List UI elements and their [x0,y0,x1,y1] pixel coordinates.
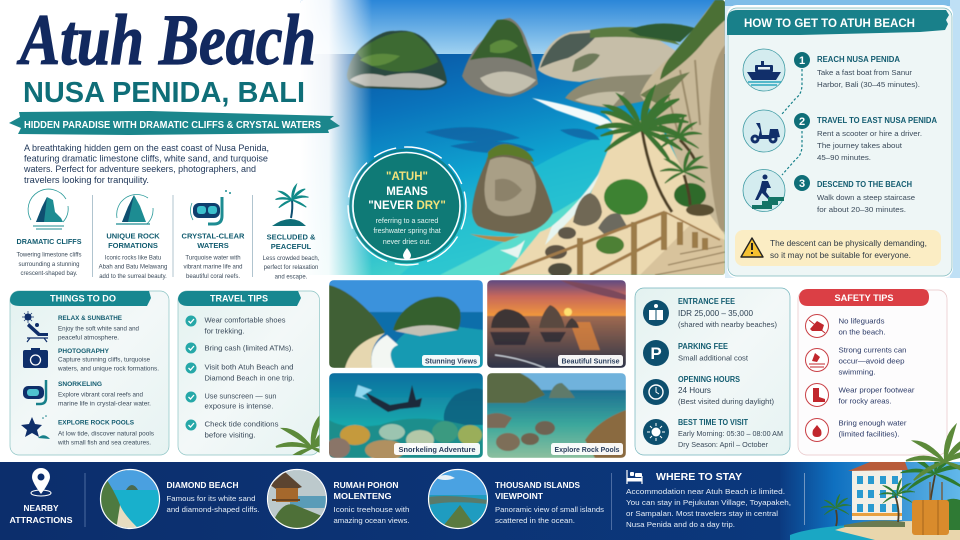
item: parking fee [643,340,748,366]
tips text: occur—avoid deep [838,356,904,366]
icon: bed [627,470,642,484]
sea colour patches [400,134,614,275]
tips text: Bring enough water [838,418,907,428]
item: snorkeling [23,380,151,408]
attraction: Thousand Islands: THOUSAND ISLANDS [495,481,580,490]
sky strip behind route panel [725,0,960,285]
item: entrance fee: ENTRANCE FEE [678,297,735,306]
icon: clock [643,379,669,405]
stair path [640,225,725,275]
icon: scooter [743,110,785,152]
where to stay: Nusa Penida and do a day trip. [626,520,735,529]
attraction: Thousand Islands: VIEWPOINT [495,492,543,501]
header: THINGS TO DO [50,294,116,304]
item: best time: Dry Season: April – October [678,442,769,449]
item: relax: Enjoy the soft white sand and [58,326,139,332]
item: best time: Early Morning: 05:30 – 08:00 AM [678,431,783,438]
feature: dramatic cliffs: crescent-shaped bay. [21,271,78,277]
item: snorkeling: Explore vibrant coral reefs and [58,392,143,398]
icon: ticket info [643,300,669,326]
palm leaf decoration [276,416,320,455]
left island [347,31,447,90]
icon: sun [643,419,669,445]
item: snorkeling: SNORKELING [58,381,102,388]
step 2: TRAVEL TO EAST NUSA PENIDA [817,116,937,125]
quote badge: Atuh means never dry [348,147,466,265]
where to stay: WHERE TO STAY [656,472,742,483]
step 1: REACH NUSA PENIDA [817,55,900,64]
tagline ribbon: HIDDEN PARADISE WITH DRAMATIC CLIFFS & CRYSTAL WATERS [24,120,321,131]
big right cliff [640,0,725,235]
tips text: for trekking. [204,326,244,336]
route dashed connectors [782,69,802,175]
feature: secluded and peaceful: Less crowded beach, [263,256,320,262]
feature: secluded and peaceful: SECLUDED & [267,232,316,242]
item: opening hours: (Best visited during daylight) [678,399,774,406]
attraction: Diamond Beach [100,468,260,530]
icon: palm island [272,185,308,226]
where to stay: or Sampalan. Most travelers stay in central [626,509,778,518]
caption: Snorkeling Adventure [398,445,476,454]
tips text: Wear proper footwear [838,386,915,394]
tips text [838,316,915,438]
item: entrance fee: IDR 25,000 – 35,000 [678,309,754,318]
tips text [204,316,294,440]
check marks [186,316,196,430]
attraction: Rumah Pohon: MOLENTENG [334,492,392,501]
header [10,291,151,306]
step 1: Take a fast boat from Sanur [817,68,913,77]
feature: unique rock formations: FORMATIONS [108,241,158,250]
feature: crystal-clear waters: Turquoise water with [185,256,241,262]
item: entrance fee: (shared with nearby beaches) [678,322,777,329]
item: parking fee: Small additional cost [678,356,748,362]
feature: dramatic cliffs: DRAMATIC CLIFFS [16,237,82,246]
quote badge: Atuh means never dry: never dries out. [383,239,431,246]
step 2 [743,110,937,162]
icon: starfish [21,415,50,439]
palm leaf decoration at right [906,426,960,480]
feature: unique rock formations: UNIQUE ROCK [106,232,160,240]
feature: secluded and peaceful: and escape. [275,274,308,280]
attraction: Diamond Beach: Famous for its white sand [166,494,256,503]
where to stay: Accommodation near Atuh Beach is limited. [626,487,785,496]
icon: snorkel mask [191,190,231,224]
icon: sun lounger [22,311,48,342]
subtitle: NUSA PENIDA, BALI [23,77,305,109]
step 2: 2 [799,116,805,128]
intro paragraph: waters. Perfect for adventure seekers, photographers, and [23,164,256,174]
tips text: Use sunscreen — sun [204,392,276,400]
hero photo: beach scene [300,0,725,275]
tips text: before visiting. [204,430,256,440]
heading: NEARBY [23,503,59,513]
quote badge: Atuh means never dry: "NEVER DRY" [368,200,446,212]
attraction: Thousand Islands: Panoramic view of small islands [495,505,604,514]
where to stay [626,470,791,529]
photo: stunning views [329,280,483,368]
item: rock pools: with small fish and sea creatures. [57,440,151,446]
palm trees [642,130,695,212]
icon: cliffs [28,189,68,229]
icon: rock [116,194,153,224]
panel: things to do [10,291,169,455]
feature: dramatic cliffs [16,189,82,277]
beach sand [505,112,725,275]
attraction: Thousand Islands: scattered in the ocean. [495,516,575,525]
step 3: DESCEND TO THE BEACH [817,180,912,189]
intro paragraph: travelers looking for tranquility. [24,175,149,185]
intro paragraph [23,143,269,185]
feature: crystal-clear waters: beautiful coral reefs. [186,274,240,280]
step 2: 45–90 minutes. [817,153,871,162]
shore rocks [573,193,602,226]
photo: explore rock pools [487,373,626,458]
green bushes [604,179,648,215]
item: relax: RELAX & SUNBATHE [58,315,122,322]
header ribbon [727,10,949,35]
step 3: for about 20–30 minutes. [817,205,906,214]
icon: boat [743,49,785,91]
panel: travel tips [178,290,320,456]
divider [92,195,252,277]
tips text: swimming. [838,368,876,376]
panel: practical info [635,288,790,455]
item: rock pools [21,415,154,446]
foreground rock [472,144,553,234]
icon: snorkel [23,380,46,404]
item: opening hours: 24 Hours [678,386,711,395]
item: parking fee: PARKING FEE [678,342,728,351]
heading [10,503,73,525]
item: rock pools: EXPLORE ROCK POOLS [58,420,134,426]
icon: map pin [31,468,51,496]
attraction: Rumah Pohon: RUMAH POHON [334,481,399,490]
panel: how to get to Atuh Beach [727,5,953,278]
warning callout [735,230,941,266]
tips text: No lifeguards [838,316,885,326]
title: Atuh Beach [17,0,316,80]
intro paragraph: featuring dramatic limestone cliffs, white sand, and turquoise [24,154,268,164]
intro paragraph: A breathtaking hidden gem on the east coast of Nusa Penida, [24,143,269,153]
step 3 [743,170,915,214]
feature: crystal-clear waters: CRYSTAL-CLEAR [182,232,245,240]
feature: unique rock formations [99,194,167,280]
icon: parking: P [650,344,662,363]
feature: unique rock formations: add to the surreal beauty. [99,274,167,280]
hotel scene [784,462,960,540]
where to stay: You can stay in Pejukutan Village, Toyapakeh, [626,498,791,507]
tagline ribbon [9,111,340,135]
tips text: on the beach. [838,328,886,336]
item: best time [643,418,783,449]
step 1 [743,49,920,91]
quote badge: Atuh means never dry: freshwater spring that [373,228,441,235]
header [799,289,929,306]
feature: dramatic cliffs: surrounding a stunning [18,262,80,268]
quote badge: Atuh means never dry: "ATUH" [386,171,428,183]
attraction: Rumah Pohon: Iconic treehouse with [334,505,410,514]
item: rock pools: At low tide, discover natural pools [58,430,154,438]
warning callout: so it may not be suitable for everyone. [770,251,911,260]
item: relax: peaceful atmosphere. [58,334,119,342]
feature: secluded and peaceful: PEACEFUL [271,242,312,251]
item: photography: waters, and unique rock formations. [57,366,159,372]
step 3: Walk down a steep staircase [817,193,915,202]
caption [394,443,480,455]
feature: secluded and peaceful: perfect for relaxation [264,265,318,271]
wooden fence [500,212,720,275]
feature: unique rock formations: Iconic rocks like Batu [105,256,161,262]
step 2: The journey takes about [817,141,902,150]
feature: unique rock formations: Abah and Batu Melawang [99,264,167,270]
item: entrance fee [643,297,777,329]
icon: camera [23,348,48,368]
tips text: Bring cash (limited ATMs). [204,344,294,352]
icons [806,314,828,442]
header [178,291,301,306]
tips text: Visit both Atuh Beach and [204,362,294,372]
heading: ATTRACTIONS [10,515,73,525]
step 2: Rent a scooter or hire a driver. [817,129,922,138]
step 1: 1 [799,55,805,67]
feature: crystal-clear waters [182,190,245,280]
icon: hiker on stairs [743,170,785,212]
tips text: exposure is intense. [204,402,274,410]
caption: Explore Rock Pools [554,445,620,454]
item: photography [23,348,159,372]
tips text: Wear comfortable shoes [204,316,286,324]
header: TRAVEL TIPS [210,294,268,304]
quote badge: Atuh means never dry: MEANS [386,186,428,198]
item: photography: Capture stunning cliffs, turquoise [58,356,151,364]
white fade on left of photo [300,0,372,276]
tips text: (limited facilities). [838,430,900,438]
tips text: for rocky areas. [838,396,892,406]
header ribbon: HOW TO GET TO ATUH BEACH [744,18,915,30]
photo: snorkeling adventure [326,373,483,460]
attraction: Diamond Beach: and diamond-shaped cliffs. [166,505,260,514]
item: relax [22,311,139,342]
photo: beautiful sunrise [487,280,626,368]
header: SAFETY TIPS [834,293,894,303]
caption: Stunning Views [425,356,477,366]
attraction: Rumah Pohon [267,468,410,530]
item: opening hours [643,375,774,406]
feature: crystal-clear waters: WATERS [197,241,229,250]
feature: dramatic cliffs: Towering limestone cliffs [17,252,81,258]
item: opening hours: OPENING HOURS [678,375,740,384]
tips text: Diamond Beach in one trip. [204,374,294,382]
tips text: Strong currents can [838,346,906,354]
feature: crystal-clear waters: vibrant marine life and [183,264,243,270]
step 1: Harbor, Bali (30–45 minutes). [817,80,920,89]
feature: secluded and peaceful [263,185,320,280]
item: photography: PHOTOGRAPHY [58,348,109,355]
item: snorkeling: marine life in crystal-clear water. [58,400,151,408]
caption: Beautiful Sunrise [562,356,620,366]
step 3: 3 [799,178,805,190]
middle island [462,18,538,97]
tips text: Check tide conditions [204,420,279,428]
item: best time: BEST TIME TO VISIT [678,418,748,427]
attraction: Thousand Islands [428,468,604,530]
far right cliffs [538,28,690,82]
icon glyphs [809,320,825,437]
panel: safety tips [798,289,947,455]
warning callout: The descent can be physically demanding, [770,239,927,248]
suitcase [912,482,949,535]
quote badge: Atuh means never dry: referring to a sacred [376,218,438,225]
attraction: Diamond Beach: DIAMOND BEACH [166,481,239,490]
attraction: Rumah Pohon: amazing ocean views. [334,516,410,525]
bottom bar: nearby attractions [0,462,960,540]
